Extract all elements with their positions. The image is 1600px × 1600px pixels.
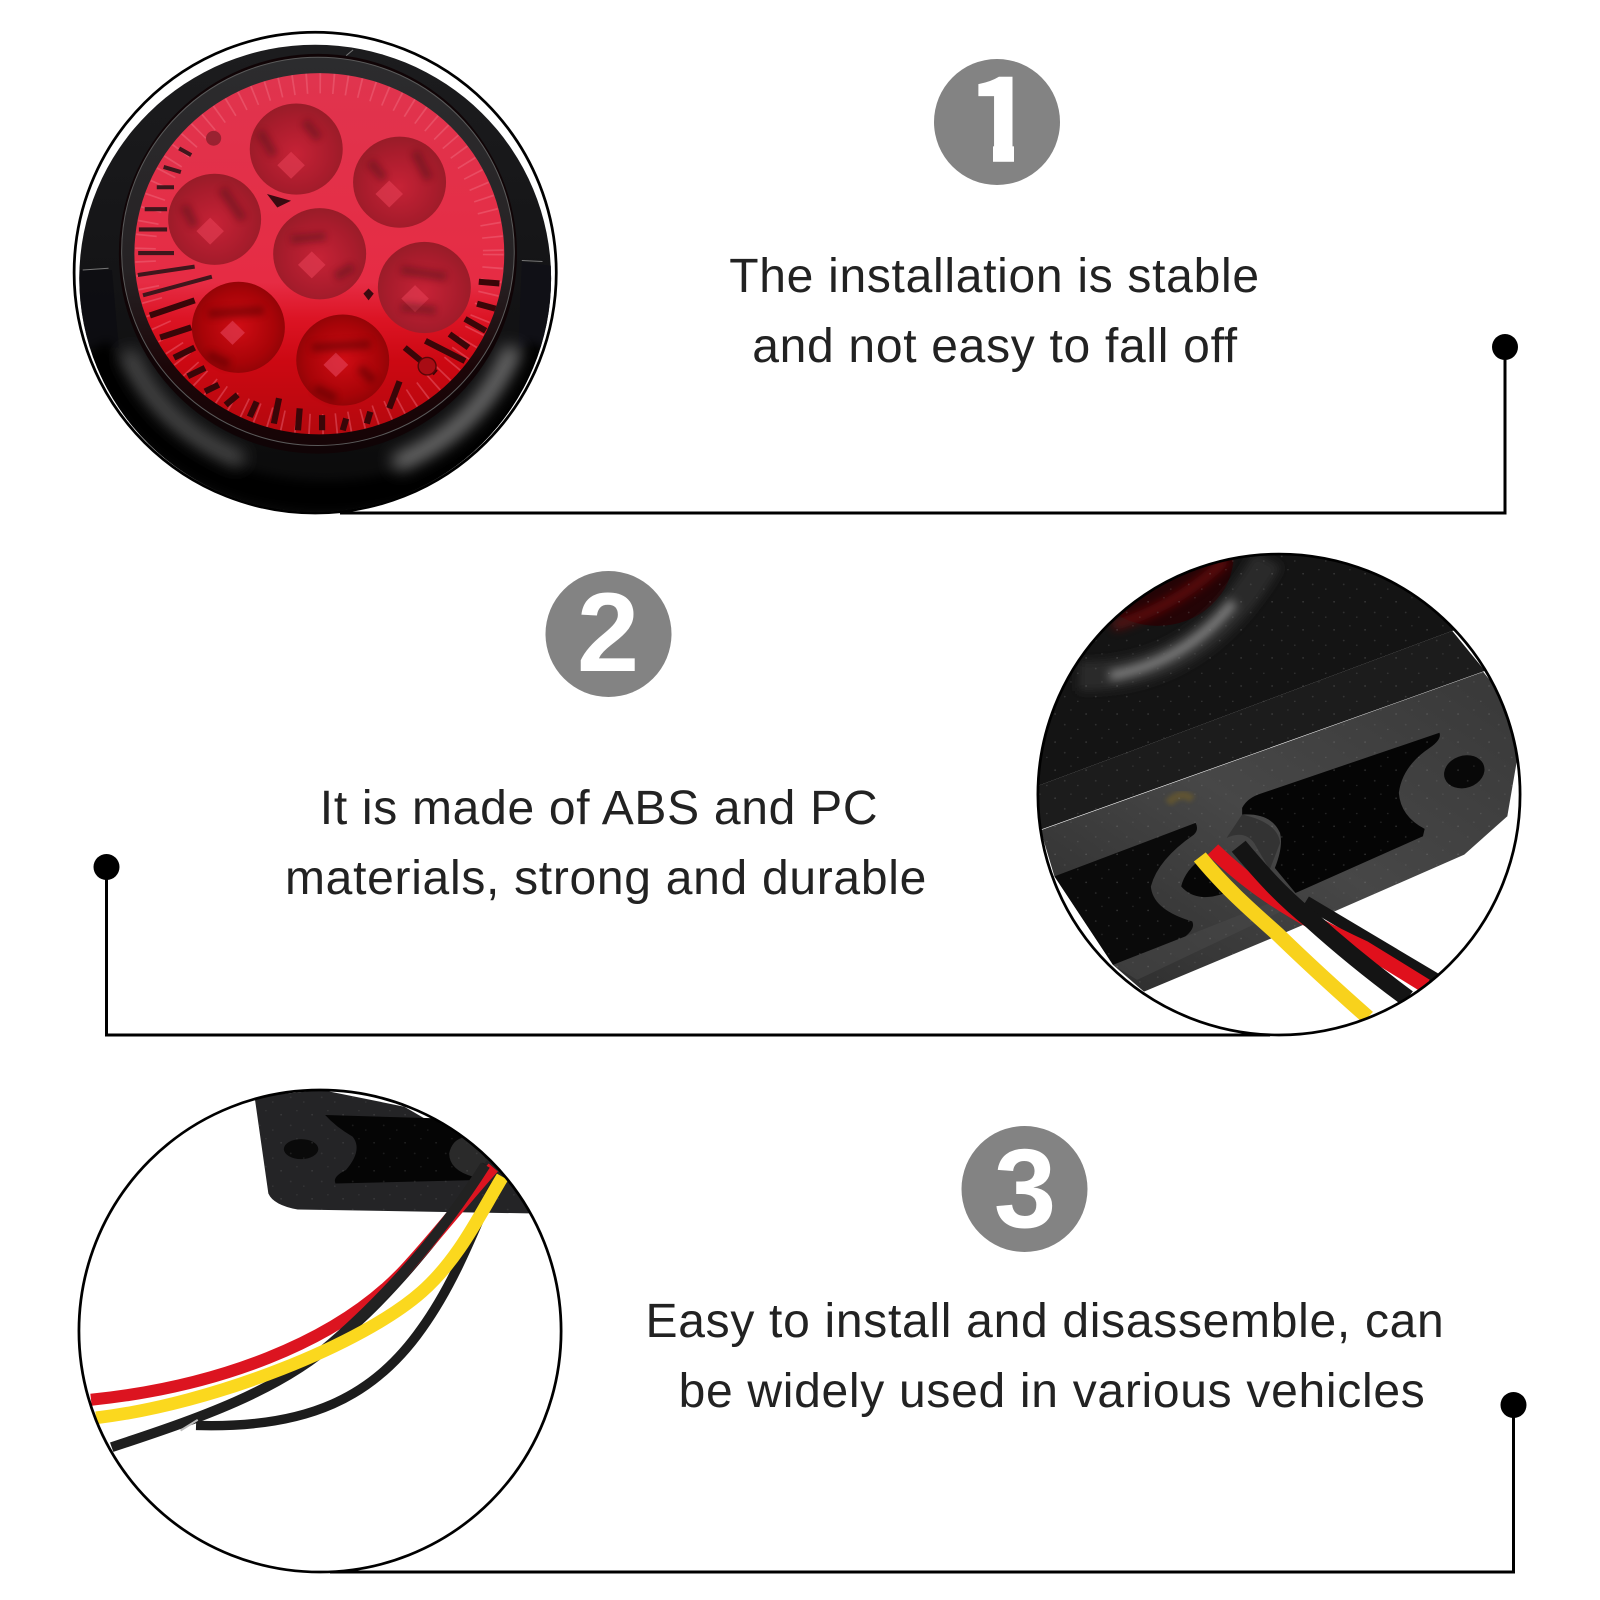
text 3: be widely used in various vehicles bbox=[679, 1365, 1425, 1418]
connector line 1 bbox=[340, 334, 1518, 513]
text 3: Easy to install and disassemble, can bbox=[646, 1295, 1444, 1348]
badge 3: 3 bbox=[994, 1126, 1056, 1251]
text 1: The installation is stable bbox=[729, 250, 1260, 303]
left slot bbox=[1054, 823, 1197, 965]
badge 1: 1 bbox=[967, 27, 1035, 195]
text 2 bbox=[285, 782, 927, 905]
flange bbox=[1041, 672, 1518, 992]
photo outline bbox=[79, 1090, 561, 1572]
connector line 2 bbox=[94, 854, 1270, 1035]
bracket bbox=[255, 1090, 535, 1214]
text 2: It is made of ABS and PC bbox=[320, 782, 878, 835]
wires bbox=[1306, 901, 1435, 978]
lamp back face bbox=[1040, 555, 1454, 786]
photo: round red LED light bbox=[74, 32, 556, 513]
badge 1 bbox=[934, 27, 1060, 195]
photo outline bbox=[1038, 554, 1520, 1035]
text 1 bbox=[729, 250, 1260, 373]
wires bbox=[112, 1165, 487, 1447]
LED modules bbox=[168, 104, 471, 406]
badge 3 bbox=[962, 1126, 1088, 1252]
text 1: and not easy to fall off bbox=[752, 320, 1238, 373]
photo: wires and bracket bbox=[79, 1090, 561, 1572]
connector line 3 bbox=[330, 1392, 1526, 1572]
text 3 bbox=[646, 1295, 1444, 1418]
right slot bbox=[1242, 733, 1440, 893]
text 2: materials, strong and durable bbox=[285, 852, 927, 905]
lens rim bbox=[119, 54, 517, 454]
lens ribs bbox=[138, 83, 499, 430]
badge 2: 2 bbox=[577, 570, 639, 695]
badge 2 bbox=[546, 570, 672, 697]
photo: mounting flange with wires bbox=[1036, 552, 1522, 1036]
